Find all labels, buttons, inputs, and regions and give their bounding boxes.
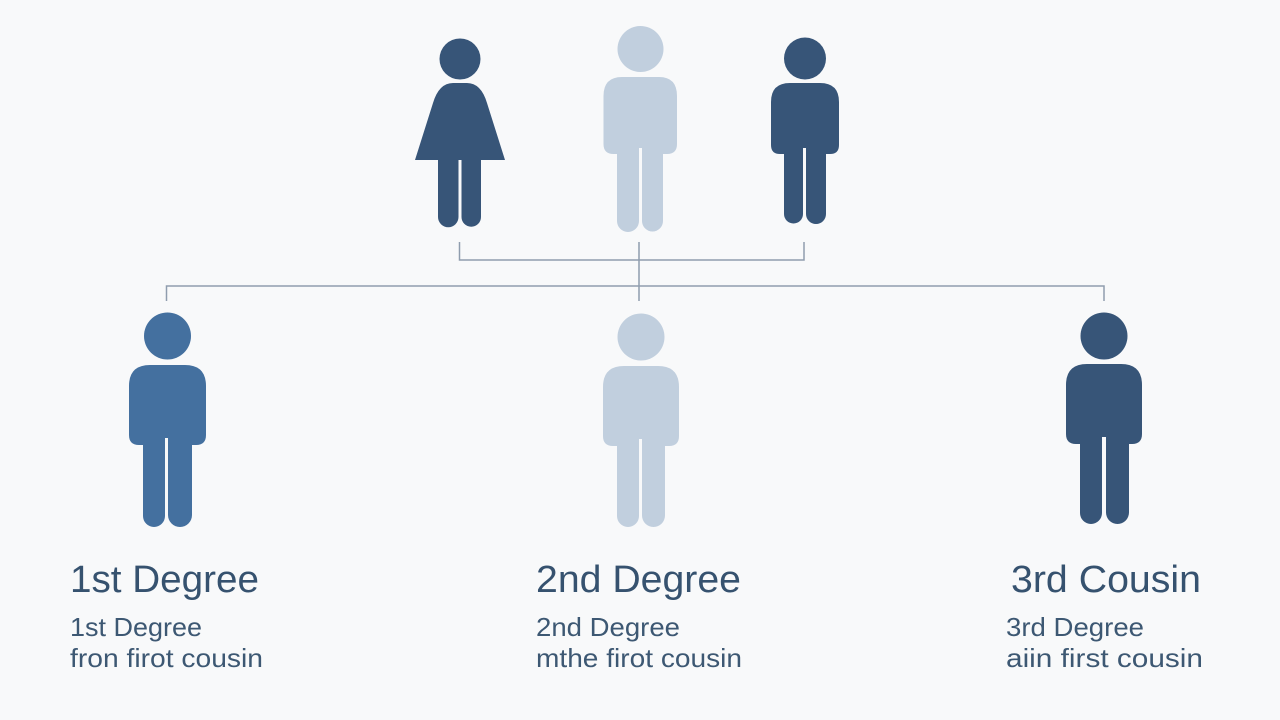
heading: 2nd Degree: 2nd Degree <box>536 559 741 601</box>
heading: 3rd Cousin: 3rd Cousin <box>1011 559 1201 601</box>
heading: 1st Degree: 1st Degree <box>70 559 259 601</box>
text: 1st degree description: fron firot cousin <box>70 643 263 673</box>
panel: 1st degree <box>70 312 263 673</box>
text: 2nd degree description <box>536 612 742 673</box>
icon: 2nd degree figure <box>603 314 679 527</box>
text: 1st degree description: 1st Degree <box>70 612 202 642</box>
panel: 3rd cousin <box>1006 312 1203 673</box>
icon: top right dark figure <box>771 38 839 224</box>
panel: 2nd degree <box>536 314 742 673</box>
icon: 3rd cousin figure <box>1066 312 1142 524</box>
icon: top centre light figure <box>604 26 677 232</box>
text: 1st degree description <box>70 612 263 673</box>
text: 3rd cousin description <box>1006 612 1203 673</box>
text: 3rd cousin description: 3rd Degree <box>1006 612 1144 642</box>
icon: 1st degree figure <box>129 312 206 527</box>
text: 3rd cousin description: aiin first cousin <box>1006 643 1203 673</box>
icon: top woman figure <box>415 38 505 227</box>
connector lines between generations <box>166 242 1104 301</box>
text: 2nd degree description: mthe firot cousin <box>536 643 742 673</box>
text: 2nd degree description: 2nd Degree <box>536 612 680 642</box>
